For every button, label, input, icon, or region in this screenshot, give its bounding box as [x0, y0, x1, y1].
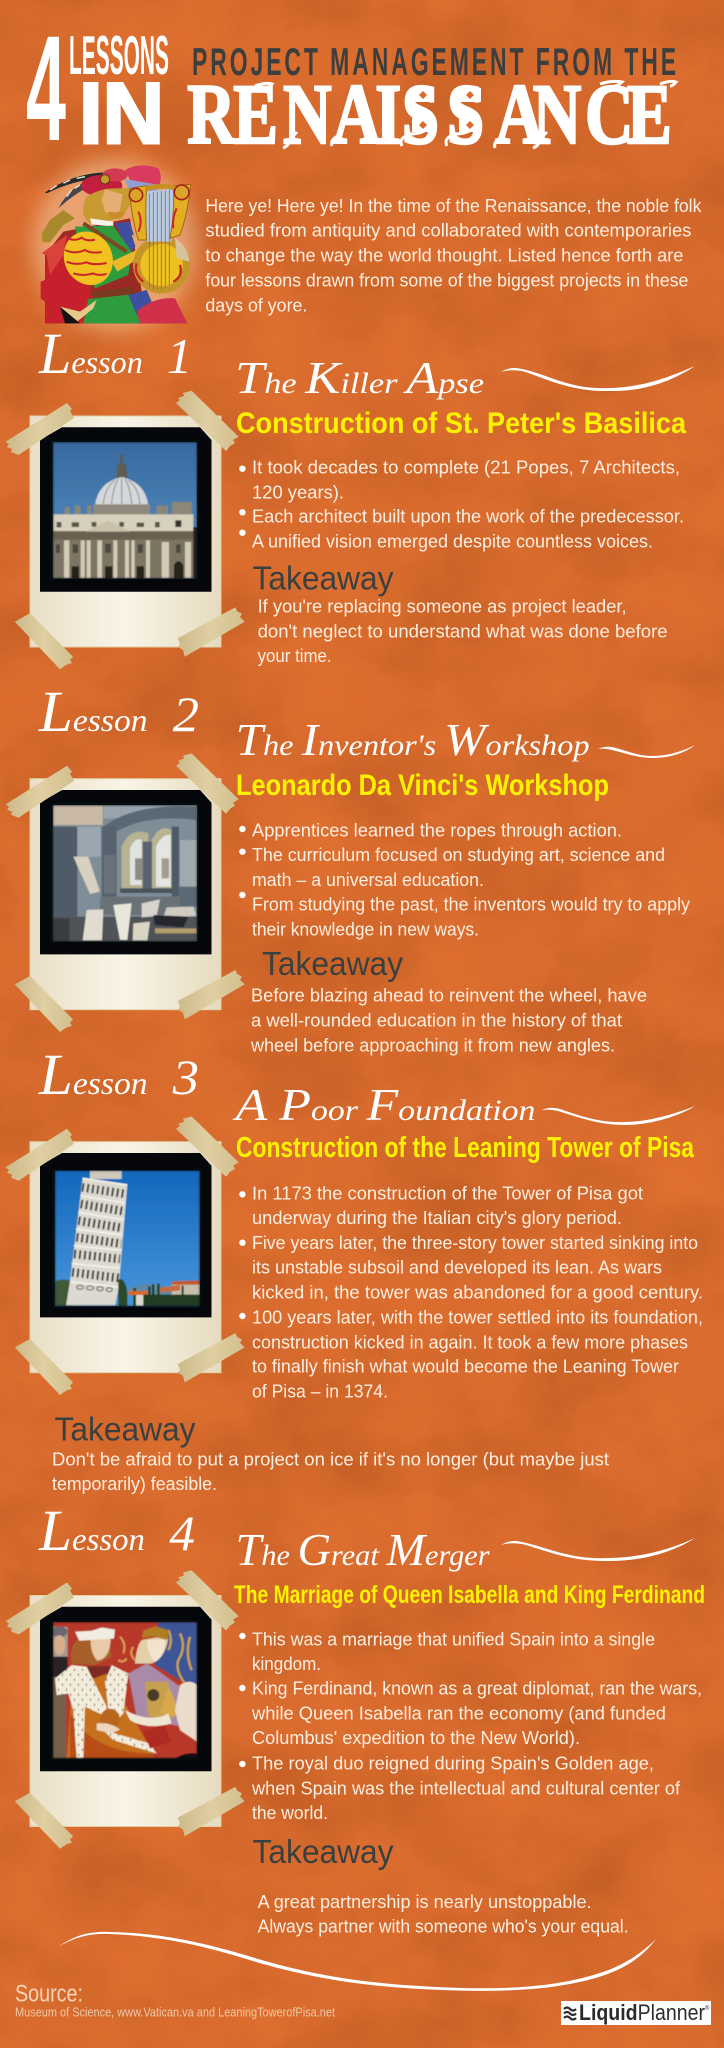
takeaway text: A great partnership is nearly unstoppable. — [258, 1892, 592, 1912]
panel: lesson 3 — [6, 1042, 703, 1494]
text block: introduction — [205, 196, 702, 316]
decorative swash — [501, 366, 695, 391]
yellow heading: Construction of St. Peter's Basilica: Construction of St. Peter's Basilica — [236, 407, 686, 440]
icon: medieval harpist illustration — [33, 159, 197, 331]
bullet list: From studying the past, the inventors would try to apply — [252, 895, 690, 915]
bullet list: to finally finish what would become the Leaning Tower — [252, 1357, 679, 1377]
heading: Lesson 2: Lesson 2 — [38, 679, 199, 744]
takeaway text: Before blazing ahead to reinvent the wheel, have — [251, 986, 647, 1006]
takeaway text: If you're replacing someone as project leader, — [258, 597, 627, 617]
photo frame with Queen Isabella and King Ferdinand — [6, 1570, 245, 1849]
bullet list: Five years later, the three-story tower started sinking into — [252, 1233, 698, 1253]
title: Renaissance blackletter: RENAISSANCE — [187, 66, 672, 162]
bullet list: 120 years). — [252, 482, 344, 502]
takeaway heading: Takeaway — [252, 559, 394, 596]
heading: Lesson 3: Lesson 3 — [38, 1042, 199, 1107]
decorative swash — [598, 745, 695, 758]
takeaway text: Don't be afraid to put a project on ice if it's no longer (but maybe just — [52, 1450, 609, 1470]
subheading: A Poor Foundation: A P oor Foundation — [232, 1079, 535, 1130]
panel: lesson 2 — [6, 679, 695, 1056]
takeaway text: don't neglect to understand what was done before — [258, 621, 668, 641]
takeaway text: Always partner with someone who's your equal. — [258, 1916, 629, 1936]
bullet list: It took decades to complete (21 Popes, 7 Architects, — [252, 457, 680, 477]
takeaway text — [258, 1892, 629, 1936]
bullet list: Columbus' expedition to the New World). — [252, 1728, 580, 1748]
bullet list — [239, 457, 684, 551]
title: LESSONS — [69, 24, 169, 86]
bullet list: underway during the Italian city's glory period. — [252, 1208, 622, 1228]
subheading: The Great Merger: The Great Merger — [236, 1524, 490, 1575]
bullet list: its unstable subsoil and developed its lean. As wars — [252, 1257, 662, 1277]
subheading: The Inventor's Workshop: The Inventor's Workshop — [236, 714, 590, 765]
bullet list: kingdom. — [252, 1654, 321, 1674]
takeaway heading: Takeaway — [262, 945, 403, 982]
bullet list: In 1173 the construction of the Tower of Pisa got — [252, 1183, 643, 1203]
bullet list: A unified vision emerged despite countless voices. — [252, 531, 653, 551]
text block: introduction: four lessons drawn from some of the biggest projects in these — [205, 271, 688, 291]
logo: LiquidPlanner: ® — [705, 2005, 710, 2012]
takeaway text — [250, 986, 647, 1056]
takeaway text: temporarily) feasible. — [52, 1474, 217, 1494]
panel: lesson 1 — [6, 321, 695, 669]
text block: introduction: Here ye! Here ye! In the time of the Renaissance, the noble folk — [205, 196, 702, 216]
text block: introduction: studied from antiquity and collaborated with contemporaries — [205, 221, 691, 241]
takeaway text: a well-rounded education in the history of that — [251, 1011, 622, 1031]
bullet list: kicked in, the tower was abandoned for a good century. — [252, 1282, 703, 1302]
decorative swash — [542, 1106, 695, 1125]
decorative swash — [501, 1538, 695, 1561]
bullet list: The curriculum focused on studying art, science and — [252, 845, 665, 865]
yellow heading: Leonardo Da Vinci's Workshop: Leonardo Da Vinci's Workshop — [236, 769, 609, 802]
bullet list: 100 years later, with the tower settled into its foundation, — [252, 1307, 703, 1327]
bullet list: The royal duo reigned during Spain's Golden age, — [252, 1753, 654, 1773]
title — [26, 4, 679, 172]
takeaway text: your time. — [258, 646, 332, 666]
photo frame with Leaning Tower of Pisa — [6, 1116, 245, 1395]
title: IN: IN — [79, 66, 164, 162]
bullet list: King Ferdinand, known as a great diplomat, ran the wars, — [252, 1679, 702, 1699]
text block: introduction: days of yore. — [205, 296, 307, 316]
subheading: The Killer Apse: The Killer Apse — [235, 352, 484, 403]
bullet list: construction kicked in again. It took a few more phases — [252, 1332, 688, 1352]
source credits — [15, 1980, 335, 2020]
takeaway text — [52, 1450, 609, 1494]
logo: LiquidPlanner: LiquidPlanner — [579, 2000, 705, 2025]
bullet list: of Pisa – in 1374. — [252, 1381, 388, 1401]
panel: lesson 4 — [6, 1498, 705, 1936]
bullet list: Apprentices learned the ropes through action. — [252, 821, 622, 841]
source credits: Source: — [15, 1980, 83, 2007]
photo frame with St. Peter's Basilica — [6, 391, 245, 669]
text block: introduction: to change the way the world thought. Listed hence forth are — [205, 246, 683, 266]
heading: Lesson 4: Lesson 4 — [38, 1498, 195, 1563]
heading: Lesson 1: Lesson 1 — [38, 321, 192, 386]
bullet list: while Queen Isabella ran the economy (and funded — [251, 1704, 666, 1724]
bullet list: their knowledge in new ways. — [252, 919, 479, 939]
bullet list: math – a universal education. — [252, 870, 484, 890]
takeaway heading: Takeaway — [252, 1833, 394, 1870]
takeaway heading: Takeaway — [54, 1411, 196, 1448]
photo frame with workshop painting — [6, 753, 245, 1032]
bullet list: Each architect built upon the work of the predecessor. — [252, 507, 684, 527]
takeaway text — [258, 597, 668, 666]
bullet list — [239, 1630, 702, 1823]
bullet list: This was a marriage that unified Spain into a single — [252, 1630, 655, 1650]
source credits: Museum of Science, www.Vatican.va and LeaningTowerofPisa.net — [15, 2005, 335, 2020]
bullet list — [239, 1183, 703, 1401]
takeaway text: wheel before approaching it from new angles. — [250, 1036, 615, 1056]
closing swash — [58, 1932, 656, 1991]
bullet list: when Spain was the intellectual and cultural center of — [251, 1778, 681, 1798]
bullet list — [239, 821, 690, 939]
bullet list: the world. — [252, 1803, 328, 1823]
title: 4 — [26, 4, 66, 172]
